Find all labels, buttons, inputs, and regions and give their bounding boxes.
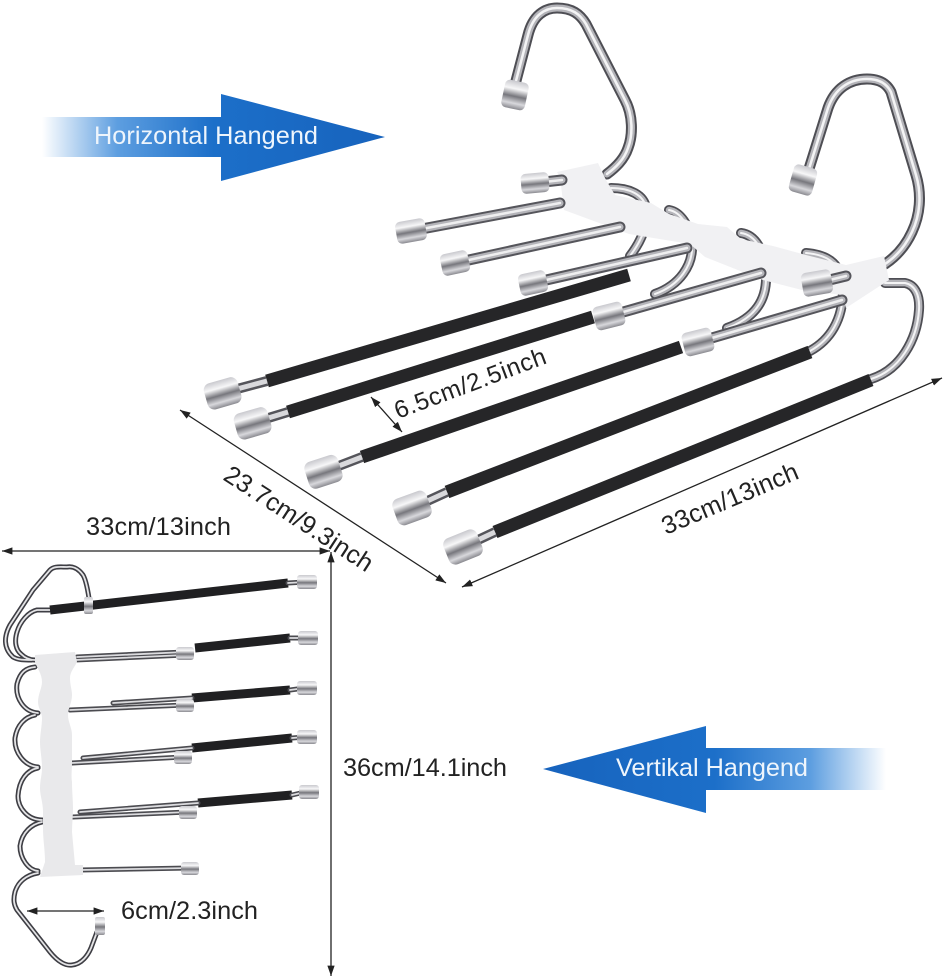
black grips (50, 583, 292, 803)
dimension: rod spacing: 6.5cm/2.5inch (391, 343, 550, 425)
dimension: vertical view height: 36cm/14.1inch (343, 754, 507, 782)
wire hooks and side loops (5, 567, 97, 965)
arrow: horizontal hanging (42, 94, 385, 181)
rod end caps (202, 172, 834, 567)
silver rod tips (222, 381, 495, 547)
arrow: vertical hanging: Vertikal Hangend (616, 754, 808, 782)
short silver rods (411, 180, 846, 342)
dimension: vertical view width: 33cm/13inch (86, 513, 231, 541)
end caps (84, 575, 319, 935)
dimension: hanger depth (180, 410, 446, 583)
long rods black grips (267, 275, 871, 532)
dimension: hook width: 6cm/2.3inch (121, 897, 258, 925)
hanger: horizontal view (202, 8, 919, 567)
dimension: hanger depth: 23.7cm/9.3inch (219, 461, 378, 578)
hook: front (788, 79, 919, 264)
white connector (35, 652, 83, 877)
silver rods (70, 582, 305, 870)
arrow: horizontal hanging: Horizontal Hangend (94, 122, 318, 150)
curved rod loops (611, 188, 919, 379)
dimension: hanger width: 33cm/13inch (657, 458, 803, 541)
arrow: vertical hanging (543, 726, 886, 813)
white connector bar (557, 163, 889, 308)
hanger: vertical view (5, 567, 319, 965)
dimension: hanger width (462, 378, 942, 587)
hook: rear (500, 8, 631, 174)
